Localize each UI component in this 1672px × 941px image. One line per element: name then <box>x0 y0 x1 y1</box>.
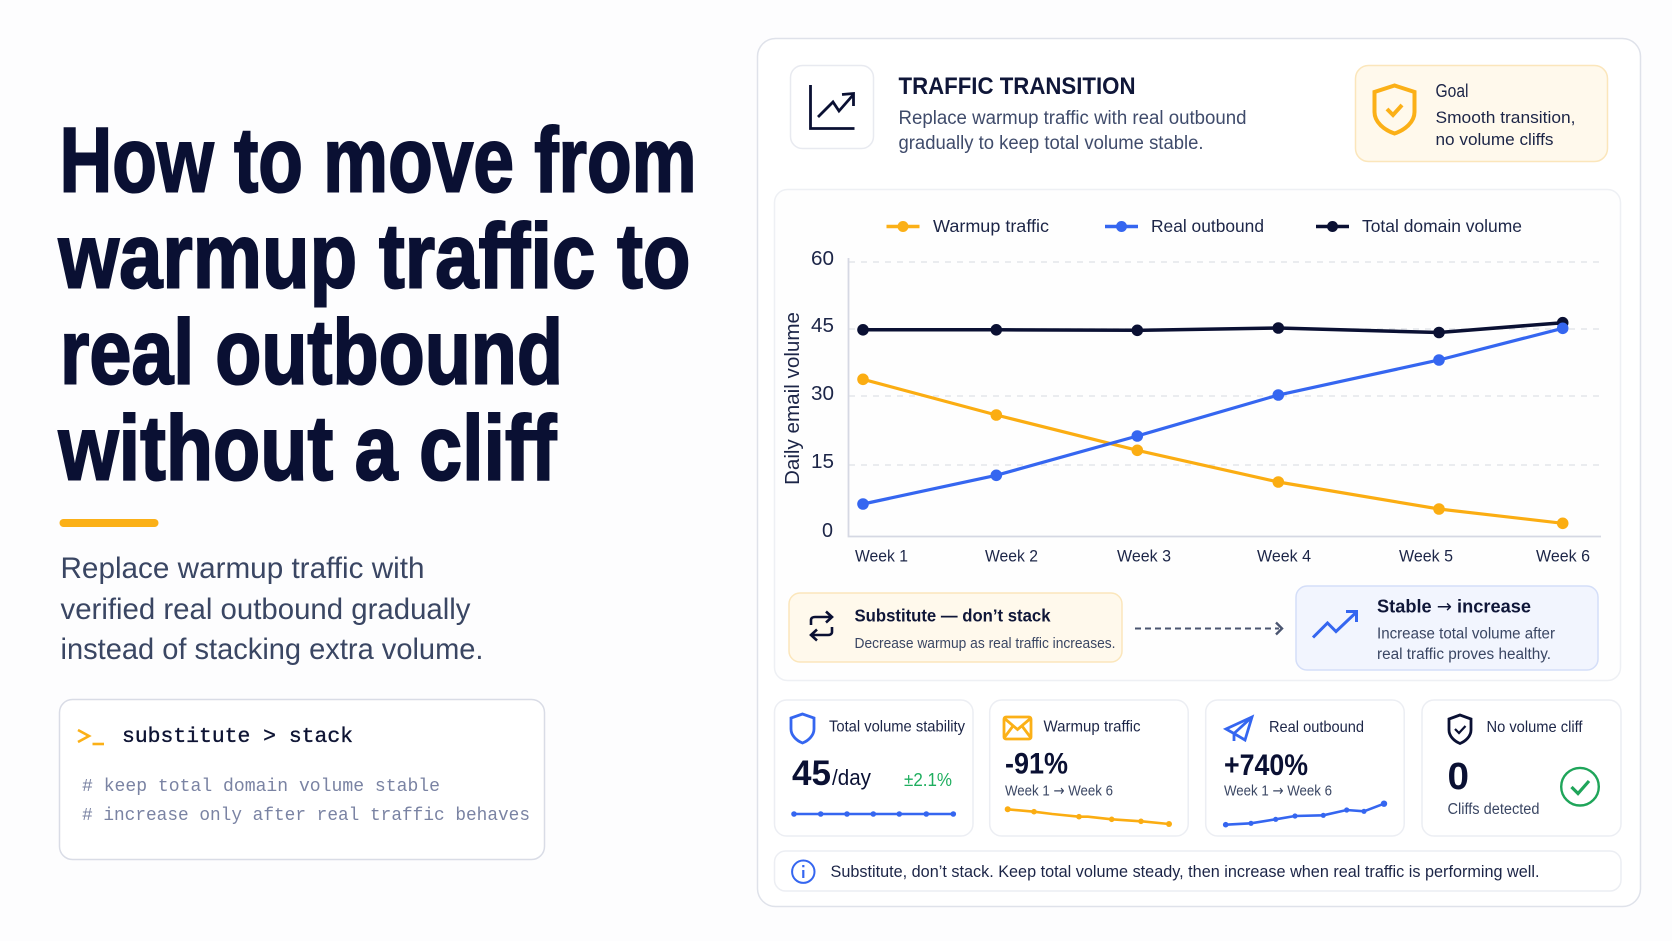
icon: green check <box>1561 768 1599 806</box>
x axis labels <box>855 546 1590 566</box>
card label: Real outbound <box>1269 719 1364 736</box>
x axis labels: Week 3 <box>1117 546 1171 566</box>
metric caption: Week 1 → Week 6 <box>1005 782 1113 800</box>
stable text <box>1377 626 1555 663</box>
substitute text: Decrease warmup as real traffic increases. <box>854 636 1116 652</box>
x axis labels: Week 2 <box>985 546 1038 566</box>
code comments: # increase only after real traffic behaves <box>82 806 530 826</box>
panel description <box>898 108 1246 154</box>
y axis labels: 30 <box>811 383 834 405</box>
title: How to move from <box>60 110 696 212</box>
line chart <box>781 248 1601 566</box>
series: warmup traffic <box>857 374 1568 529</box>
icon: info <box>792 860 814 883</box>
legend: Real outbound <box>1151 216 1264 236</box>
y axis labels: 0 <box>822 520 833 542</box>
icon: dark shield <box>1449 715 1471 744</box>
y axis labels: 60 <box>811 248 834 270</box>
title <box>58 110 697 500</box>
metric caption: Week 1 → Week 6 <box>1224 782 1332 800</box>
stable text: Increase total volume after <box>1377 626 1555 642</box>
substitute heading: Substitute — don’t stack <box>854 606 1051 626</box>
subtitle: instead of stacking extra volume. <box>60 633 484 666</box>
code comments <box>82 777 530 826</box>
legend <box>886 216 1522 236</box>
stat card: real outbound <box>1206 700 1404 836</box>
panel description: gradually to keep total volume stable. <box>898 133 1204 154</box>
metric delta: ±2.1% <box>904 770 952 790</box>
subtitle: Replace warmup traffic with <box>60 552 424 585</box>
code box <box>60 700 544 860</box>
stat card: no volume cliff <box>1422 700 1621 836</box>
icon: terminal prompt <box>78 730 104 744</box>
goal text: no volume cliffs <box>1436 130 1554 149</box>
series: real outbound <box>857 322 1568 510</box>
sparkline: real outbound growth <box>1223 800 1387 828</box>
icon: swap arrows <box>811 612 832 640</box>
metric caption: Cliffs detected <box>1448 801 1540 818</box>
icon: trend up <box>1313 612 1356 638</box>
callout: substitute <box>789 593 1122 662</box>
goal text <box>1436 81 1576 149</box>
code comments: # keep total domain volume stable <box>82 777 440 797</box>
x axis labels: Week 6 <box>1536 546 1590 566</box>
title: without a cliff <box>58 398 557 500</box>
callout: goal <box>1356 66 1608 162</box>
stat card: total volume stability <box>774 700 973 836</box>
stat card: warmup traffic <box>990 700 1188 836</box>
series: total domain volume <box>857 317 1568 338</box>
y axis labels <box>811 248 834 542</box>
callout: stable then increase <box>1296 586 1598 670</box>
icon: blue shield <box>791 714 814 743</box>
x axis labels: Week 1 <box>855 546 908 566</box>
panel: chart card <box>774 190 1620 680</box>
y axis labels: 45 <box>811 315 834 337</box>
info bar <box>774 851 1621 891</box>
metric: 45 per day: /day <box>832 765 871 790</box>
stable heading: Stable → increase <box>1377 596 1531 618</box>
card label: Warmup traffic <box>1044 718 1140 736</box>
y axis title: Daily email volume <box>781 312 804 485</box>
card label: No volume cliff <box>1486 719 1583 736</box>
goal text: Goal <box>1436 81 1468 101</box>
metric: plus 740 percent: +740% <box>1224 749 1308 782</box>
title: real outbound <box>60 302 563 404</box>
y axis labels: 15 <box>811 451 834 473</box>
sparkline: warmup decline <box>1005 806 1172 827</box>
x axis labels: Week 4 <box>1257 546 1311 566</box>
metric: minus 91 percent: -91% <box>1005 748 1068 780</box>
info text: Substitute, don’t stack. Keep total volume steady, then increase when real traffic is performing well. <box>830 862 1540 881</box>
icon: paper plane <box>1226 717 1252 741</box>
metric: 45 per day: 45 <box>792 754 831 793</box>
icon: goal shield <box>1374 86 1414 134</box>
arrow: substitute to stable <box>1135 622 1282 634</box>
icon: envelope <box>1004 717 1031 739</box>
panel heading: TRAFFIC TRANSITION <box>898 73 1136 100</box>
x axis labels: Week 5 <box>1399 546 1453 566</box>
panel description: Replace warmup traffic with real outbound <box>898 108 1246 129</box>
metric: 45 per day <box>792 754 871 793</box>
subtitle <box>60 552 484 666</box>
metric: zero: 0 <box>1448 756 1469 798</box>
legend: Warmup traffic <box>933 216 1049 236</box>
title: warmup traffic to <box>58 206 691 308</box>
sparkline: stable <box>791 811 956 817</box>
code command: substitute > stack <box>122 725 353 749</box>
panel: traffic transition <box>758 38 1640 906</box>
stable text: real traffic proves healthy. <box>1377 646 1551 663</box>
icon: chart trend box <box>790 66 874 148</box>
card label: Total volume stability <box>829 718 965 736</box>
subtitle: verified real outbound gradually <box>60 593 470 626</box>
goal text: Smooth transition, <box>1436 108 1576 127</box>
legend: Total domain volume <box>1362 216 1522 236</box>
accent bar <box>60 519 158 527</box>
